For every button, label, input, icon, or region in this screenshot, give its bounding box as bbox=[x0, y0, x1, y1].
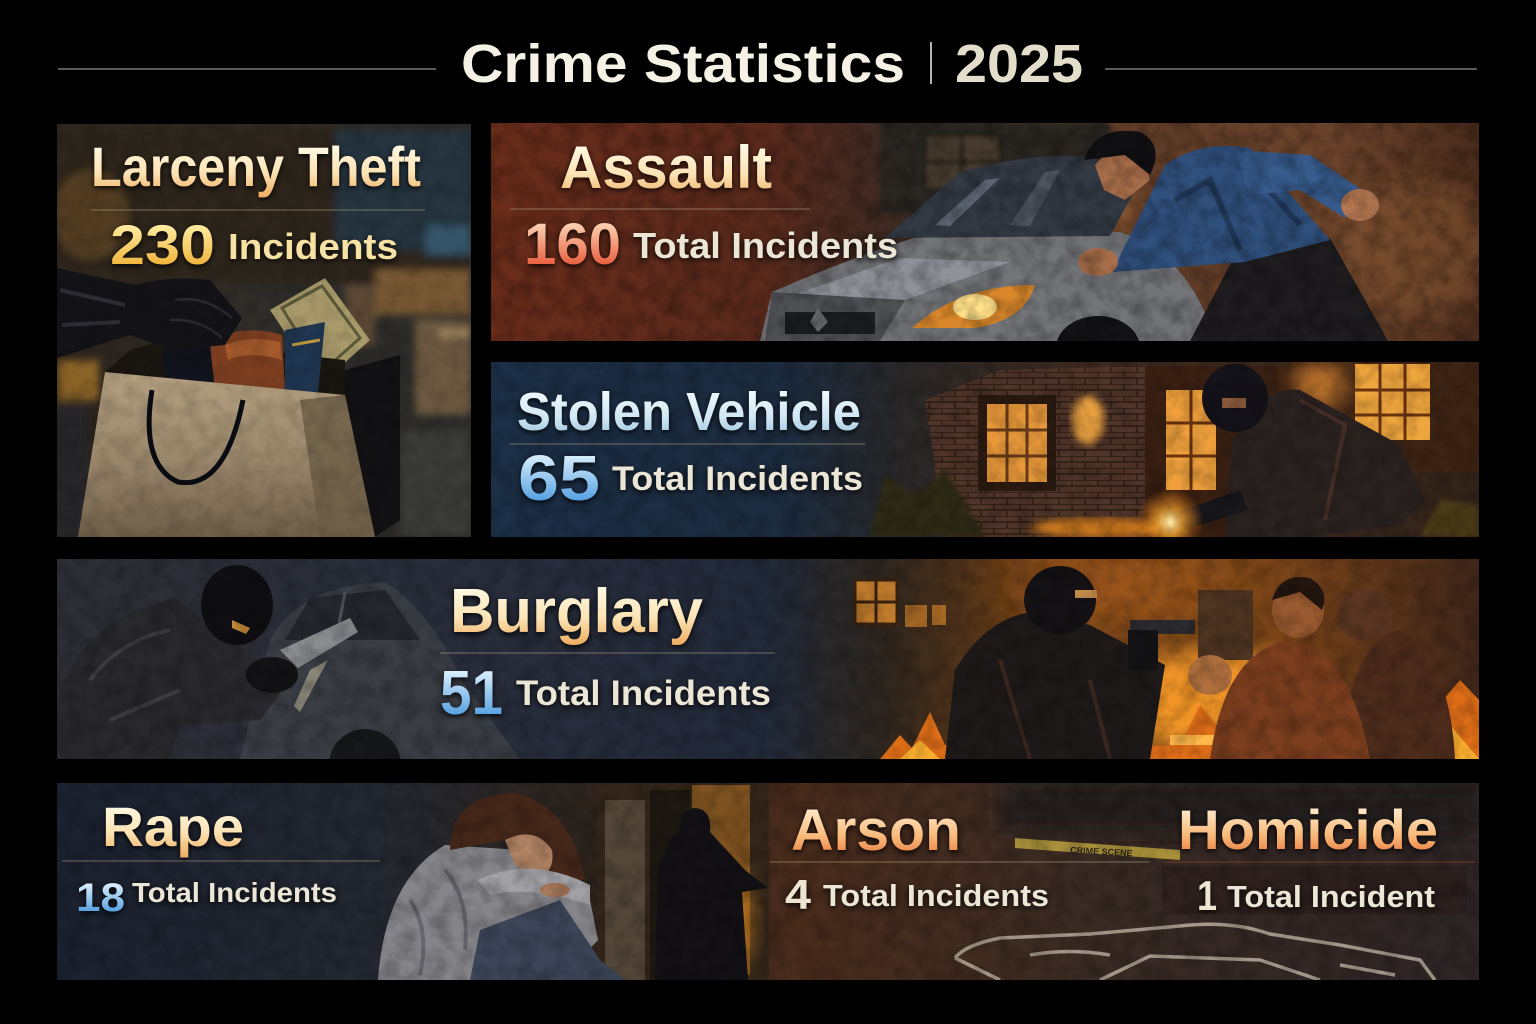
panel: burglary bbox=[57, 559, 1479, 759]
panel: larceny theft bbox=[52, 124, 471, 537]
stat: 160 total incidents: 160 bbox=[524, 212, 621, 277]
panel: assault bbox=[491, 123, 1500, 380]
stat: 230 incidents: Incidents bbox=[228, 226, 398, 267]
icon: car bbox=[760, 156, 1205, 341]
stat: 65 total incidents: 65 bbox=[518, 442, 600, 514]
icon: crime scene tape: CRIME SCENE bbox=[1070, 845, 1133, 858]
heading: larceny theft: Larceny Theft bbox=[91, 135, 421, 198]
heading: homicide: Homicide bbox=[1178, 798, 1438, 861]
icon: car bbox=[240, 582, 520, 759]
title: 2025 bbox=[955, 34, 1083, 94]
icon: victims bbox=[1188, 577, 1455, 759]
heading: assault: Assault bbox=[560, 134, 772, 201]
heading: stolen vehicle: Stolen Vehicle bbox=[517, 382, 861, 442]
stat: 51 total incidents: 51 bbox=[440, 659, 503, 728]
icon: burglar at car door bbox=[57, 565, 358, 759]
stat: 230 incidents: 230 bbox=[110, 213, 215, 276]
icon: chalk outline bbox=[955, 924, 1435, 980]
stat: 65 total incidents: Total Incidents bbox=[612, 460, 863, 498]
heading: burglary: Burglary bbox=[450, 577, 704, 646]
stat: 4 total incidents: Total Incidents bbox=[823, 878, 1049, 913]
icon: attacker bbox=[1078, 131, 1388, 341]
stat: 65 total incidents bbox=[518, 454, 863, 506]
building background bbox=[880, 123, 1500, 320]
icon: crime scene tape bbox=[1015, 838, 1180, 860]
icon: armed figure bbox=[945, 566, 1195, 759]
heading: rape: Rape bbox=[102, 795, 244, 858]
panel: rape, arson, homicide bbox=[57, 783, 1479, 980]
stat: 51 total incidents bbox=[440, 670, 771, 720]
stat: 160 total incidents bbox=[524, 222, 900, 270]
title: Crime Statistics bbox=[461, 34, 905, 94]
icon: items in bag bbox=[105, 278, 370, 398]
icon: burglar with flashlight bbox=[1138, 364, 1424, 537]
shop background bbox=[52, 124, 471, 537]
stat: 18 total incidents bbox=[78, 882, 337, 916]
stat: 51 total incidents: Total Incidents bbox=[516, 674, 771, 713]
stat: 160 total incidents: Total Incidents bbox=[633, 225, 898, 266]
stat: 18 total incidents: 18 bbox=[76, 876, 125, 920]
stat: 4 total incidents: 4 bbox=[785, 871, 812, 918]
stat: 1 total incident: 1 bbox=[1197, 872, 1217, 919]
house background bbox=[870, 362, 1479, 538]
stat: 230 incidents bbox=[110, 224, 398, 268]
stat: 18 total incidents: Total Incidents bbox=[132, 877, 337, 908]
icon: shopping bag bbox=[78, 355, 400, 537]
icon: gloved arm bbox=[57, 268, 242, 358]
icon: seated woman bbox=[378, 793, 625, 980]
heading: arson: Arson bbox=[791, 798, 961, 863]
stat: 1 total incident: Total Incident bbox=[1227, 879, 1435, 914]
title bbox=[58, 34, 1477, 94]
fire and house background bbox=[855, 559, 1479, 759]
doorway background bbox=[597, 783, 1479, 980]
icon: intruder in doorway bbox=[655, 808, 768, 980]
panel: stolen vehicle bbox=[491, 362, 1479, 556]
